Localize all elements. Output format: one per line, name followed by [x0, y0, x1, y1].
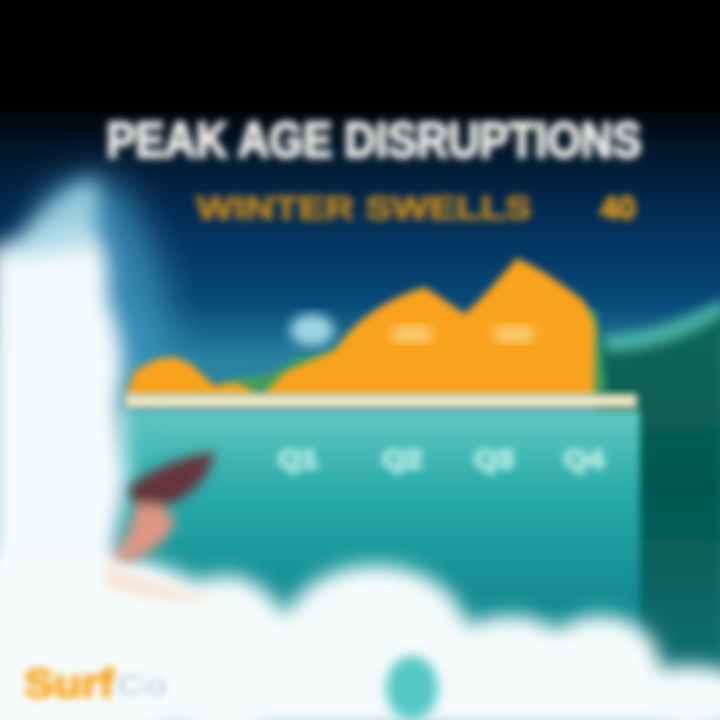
dark green wave wall: [596, 298, 720, 680]
left blue spray: [40, 177, 170, 400]
bottom foam: [0, 550, 720, 720]
left white wave spray: [0, 178, 220, 720]
axis labels: [278, 444, 605, 474]
small cloud splash behind chart: [290, 314, 334, 346]
title: PEAK AGE DISRUPTIONS: [106, 112, 642, 168]
orange area: [126, 258, 595, 396]
foam teal gap: [386, 656, 438, 720]
logo suffix: Co: [116, 669, 168, 702]
label 3: Q3: [474, 444, 514, 474]
subtitle number: 40: [600, 190, 636, 226]
surfer: [105, 452, 215, 601]
green area edge: [205, 310, 606, 392]
surfer body: [112, 504, 175, 562]
area chart: [125, 258, 637, 408]
chart highlights: [393, 326, 533, 342]
teal sea panel: [118, 410, 640, 670]
surfer hair: [128, 452, 215, 505]
label 2: Q2: [382, 444, 422, 474]
label 1: Q1: [278, 444, 318, 474]
logo mark: Surf: [24, 662, 115, 706]
chart baseline: [125, 394, 637, 408]
subtitle: WINTER SWELLS: [196, 190, 532, 226]
logo: [24, 662, 168, 706]
surfboard: [105, 565, 215, 601]
label 4: Q4: [564, 444, 605, 474]
